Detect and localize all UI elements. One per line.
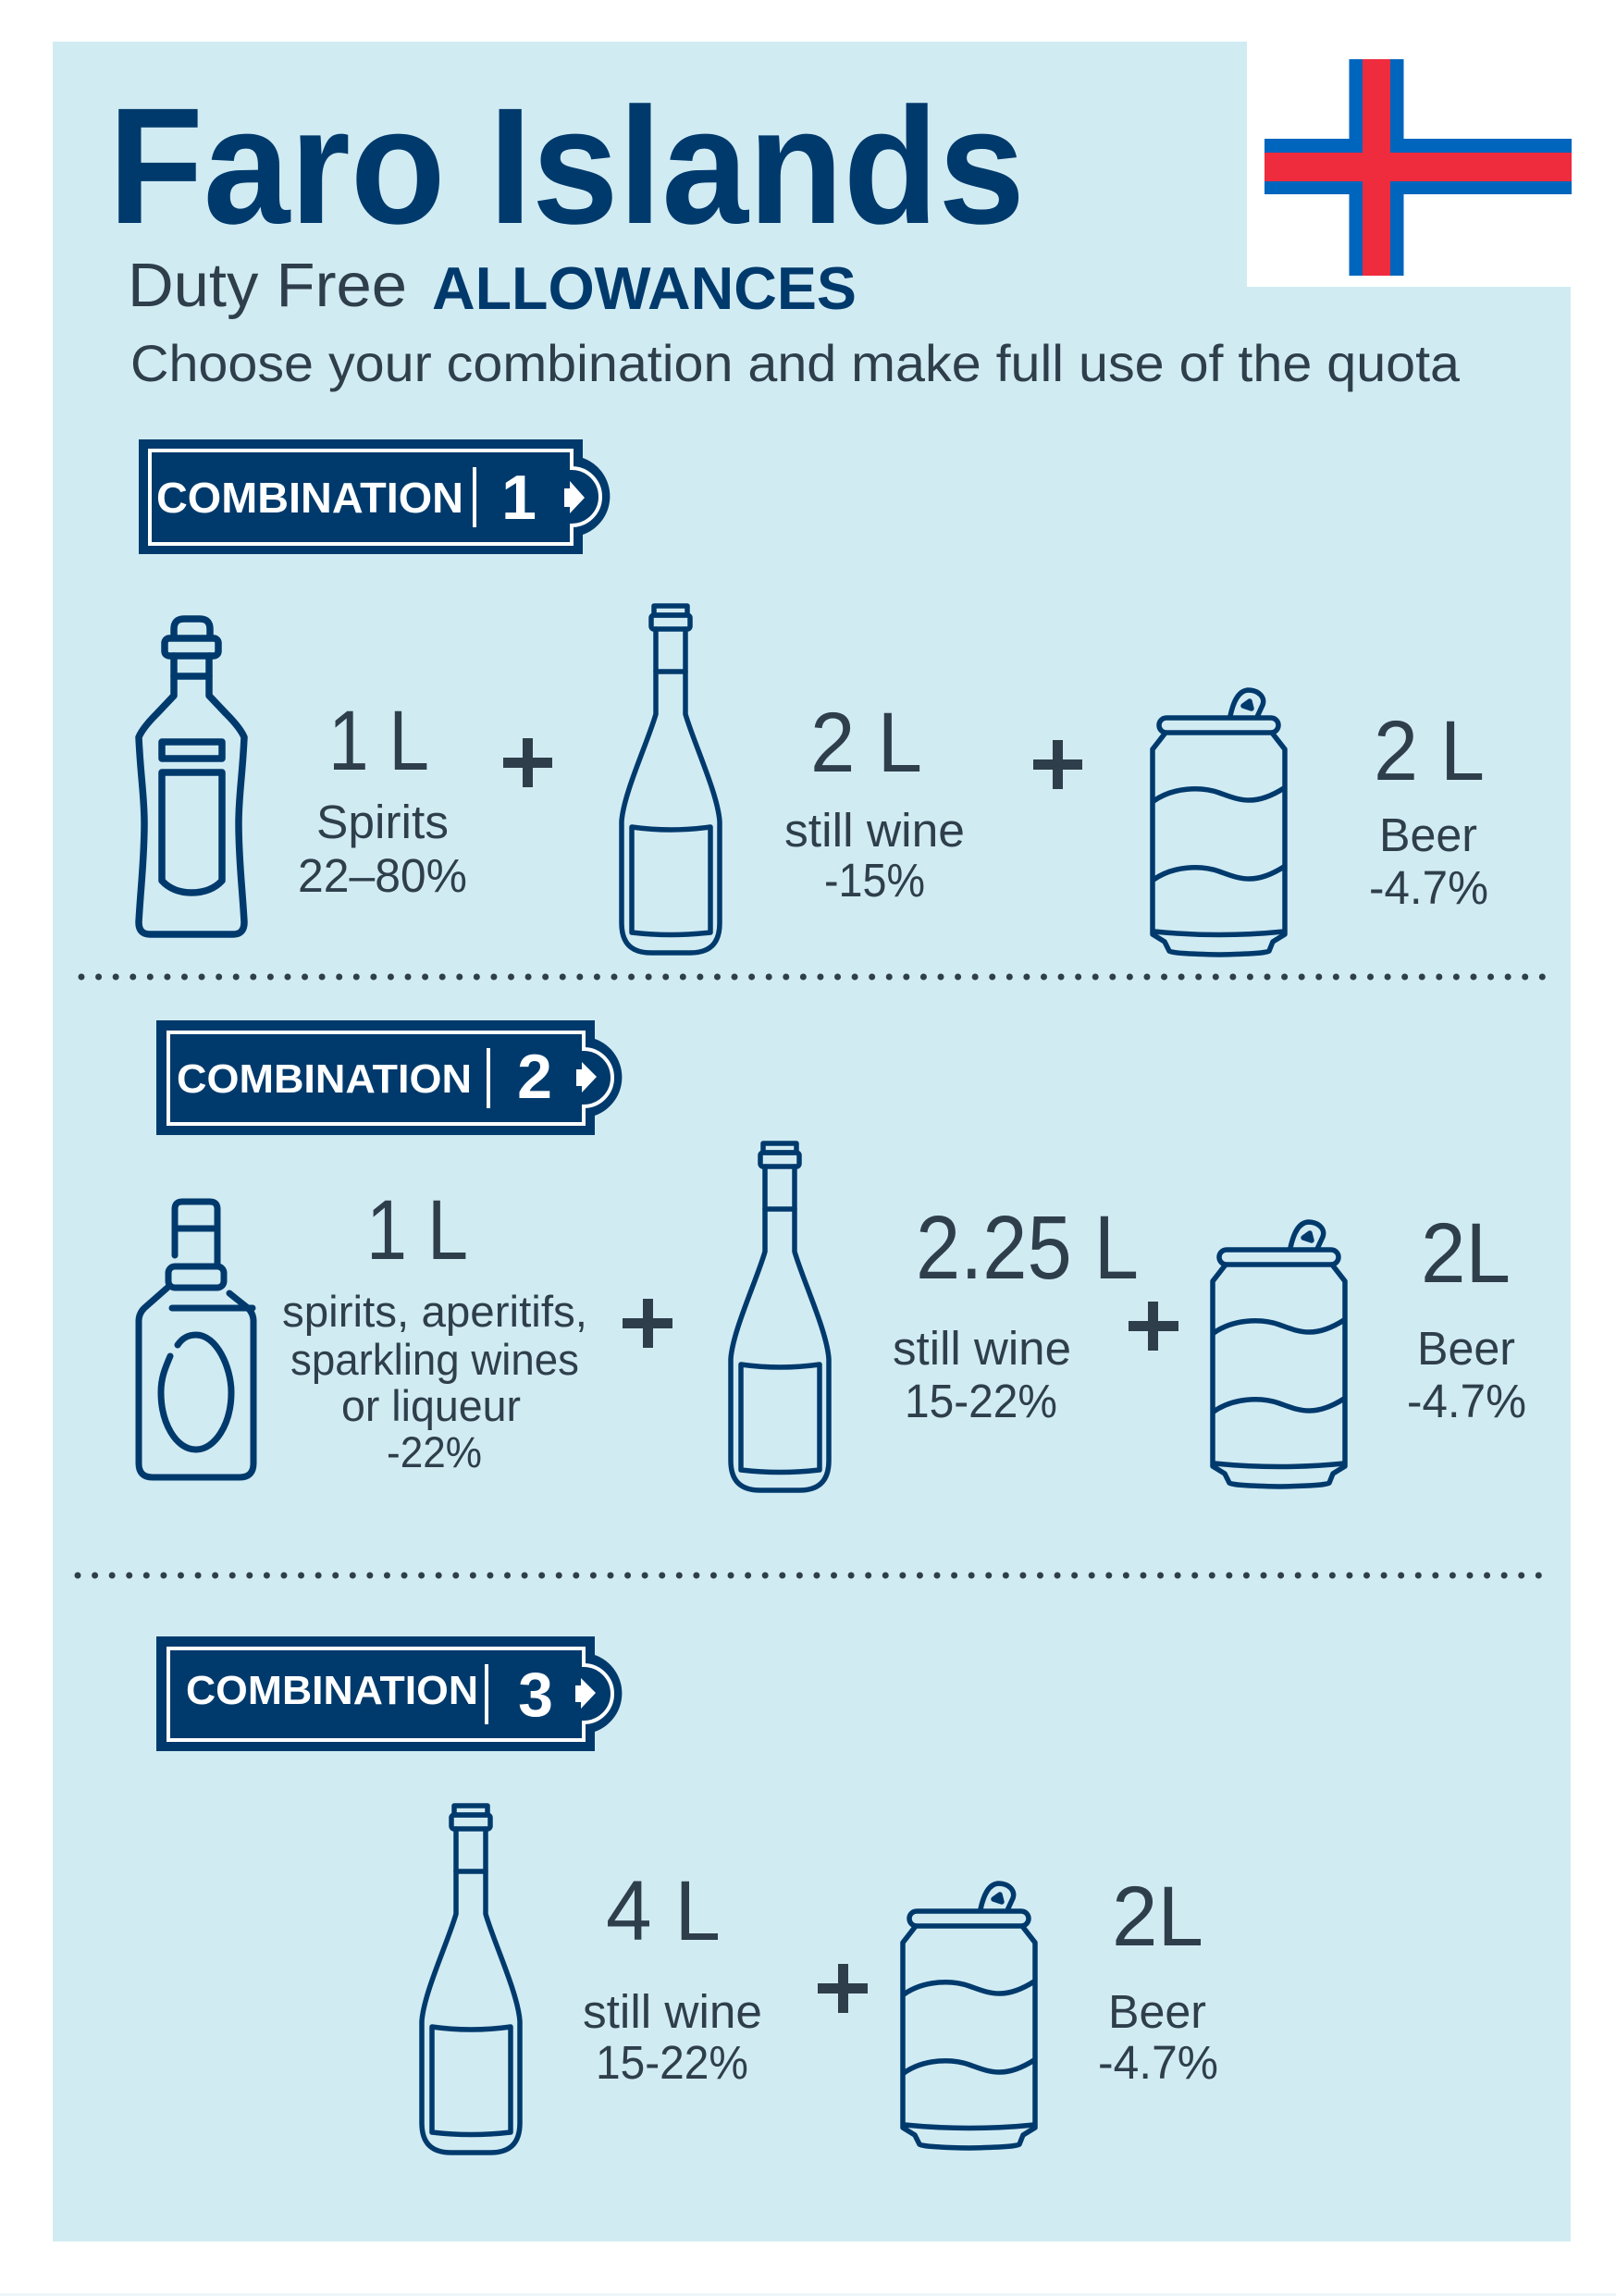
text: 1 L spirits, aperitifs, sparkling wines or liqueur — [282, 1183, 587, 1476]
badge: combination 3: 3 — [518, 1660, 553, 1730]
icon: plus — [1129, 1302, 1178, 1351]
text: 2.25 L still wine: 15-22% — [905, 1375, 1057, 1427]
badge: combination 1 — [139, 439, 610, 554]
text: 4 L still wine — [583, 1864, 762, 2089]
panel: combination 1 — [139, 439, 1488, 955]
text: 2L beer: Beer — [1417, 1322, 1515, 1375]
text: 2L beer: Beer — [1108, 1985, 1206, 2038]
icon: beer can — [903, 1883, 1035, 2148]
text: 1 L spirits, aperitifs, sparkling wines or liqueur: spirits, aperitifs, — [282, 1287, 587, 1336]
icon: plus — [1033, 740, 1082, 789]
text: 2 L beer: Beer — [1379, 809, 1477, 861]
badge: combination 1: COMBINATION — [156, 474, 463, 522]
badge: combination 1: 1 — [501, 463, 537, 533]
text: 2 L still wine: 2 L — [810, 696, 922, 790]
panel: combination 2 — [139, 1020, 1526, 1490]
icon: wine bottle — [622, 606, 720, 953]
badge: combination 3: COMBINATION — [186, 1668, 478, 1713]
text: 1 L spirits, aperitifs, sparkling wines or liqueur: -22% — [387, 1427, 482, 1476]
text: 2 L still wine: still wine — [784, 804, 965, 857]
subtitle: allowances: ALLOWANCES — [432, 254, 857, 322]
text: 2 L beer — [1369, 704, 1488, 914]
icon: plus — [503, 738, 552, 787]
text: 2L beer: -4.7% — [1098, 2036, 1218, 2089]
icon: spirits bottle — [139, 619, 244, 934]
text: 2.25 L still wine: still wine — [893, 1322, 1071, 1375]
text: 1 L spirits — [298, 694, 467, 902]
text: 1 L spirits, aperitifs, sparkling wines or liqueur: 1 L — [366, 1183, 468, 1278]
text: 2L beer: 2L — [1112, 1870, 1203, 1964]
icon: plus — [818, 1964, 868, 2013]
badge: combination 3 — [156, 1636, 622, 1751]
text: 1 L spirits: Spirits — [316, 796, 449, 848]
text: 4 L still wine: still wine — [583, 1985, 762, 2038]
icon: wine bottle — [422, 1806, 520, 2153]
text: 2L beer: 2L — [1421, 1206, 1511, 1301]
text: 2 L still wine — [784, 696, 965, 907]
text: 4 L still wine: 15-22% — [596, 2036, 748, 2089]
text: 2.25 L still wine: 2.25 L — [916, 1197, 1139, 1298]
text: 1 L spirits: 1 L — [328, 694, 429, 788]
text: 2 L still wine: -15% — [824, 854, 925, 907]
title: Faro Islands — [108, 73, 1025, 258]
text: 4 L still wine: 4 L — [606, 1864, 721, 1958]
badge: combination 2 — [156, 1020, 622, 1135]
icon: squat liquor bottle — [139, 1202, 253, 1477]
text: 1 L spirits: 22–80% — [298, 849, 467, 902]
text: 2 L beer: 2 L — [1374, 704, 1485, 798]
icon: beer can — [1213, 1222, 1345, 1487]
text: 2.25 L still wine — [893, 1197, 1139, 1427]
panel: combination 3 — [156, 1636, 1218, 2153]
text: 2L beer — [1407, 1206, 1526, 1427]
badge: combination 2: COMBINATION — [177, 1056, 472, 1102]
text: 1 L spirits, aperitifs, sparkling wines or liqueur: or liqueur — [341, 1381, 521, 1430]
icon: plus — [623, 1299, 672, 1348]
icon: beer can — [1153, 690, 1285, 955]
text: 1 L spirits, aperitifs, sparkling wines or liqueur: sparkling wines — [290, 1335, 579, 1384]
icon: wine bottle — [731, 1143, 829, 1490]
text: 2L beer — [1098, 1870, 1218, 2089]
badge: combination 2: 2 — [517, 1042, 552, 1112]
text: 2L beer: -4.7% — [1407, 1375, 1526, 1427]
intro text: Choose your combination and make full use of the quota — [130, 334, 1461, 392]
subtitle: duty free: Duty Free — [128, 251, 407, 320]
flag of the Faroe Islands — [1264, 59, 1572, 276]
text: 2 L beer: -4.7% — [1369, 861, 1488, 914]
